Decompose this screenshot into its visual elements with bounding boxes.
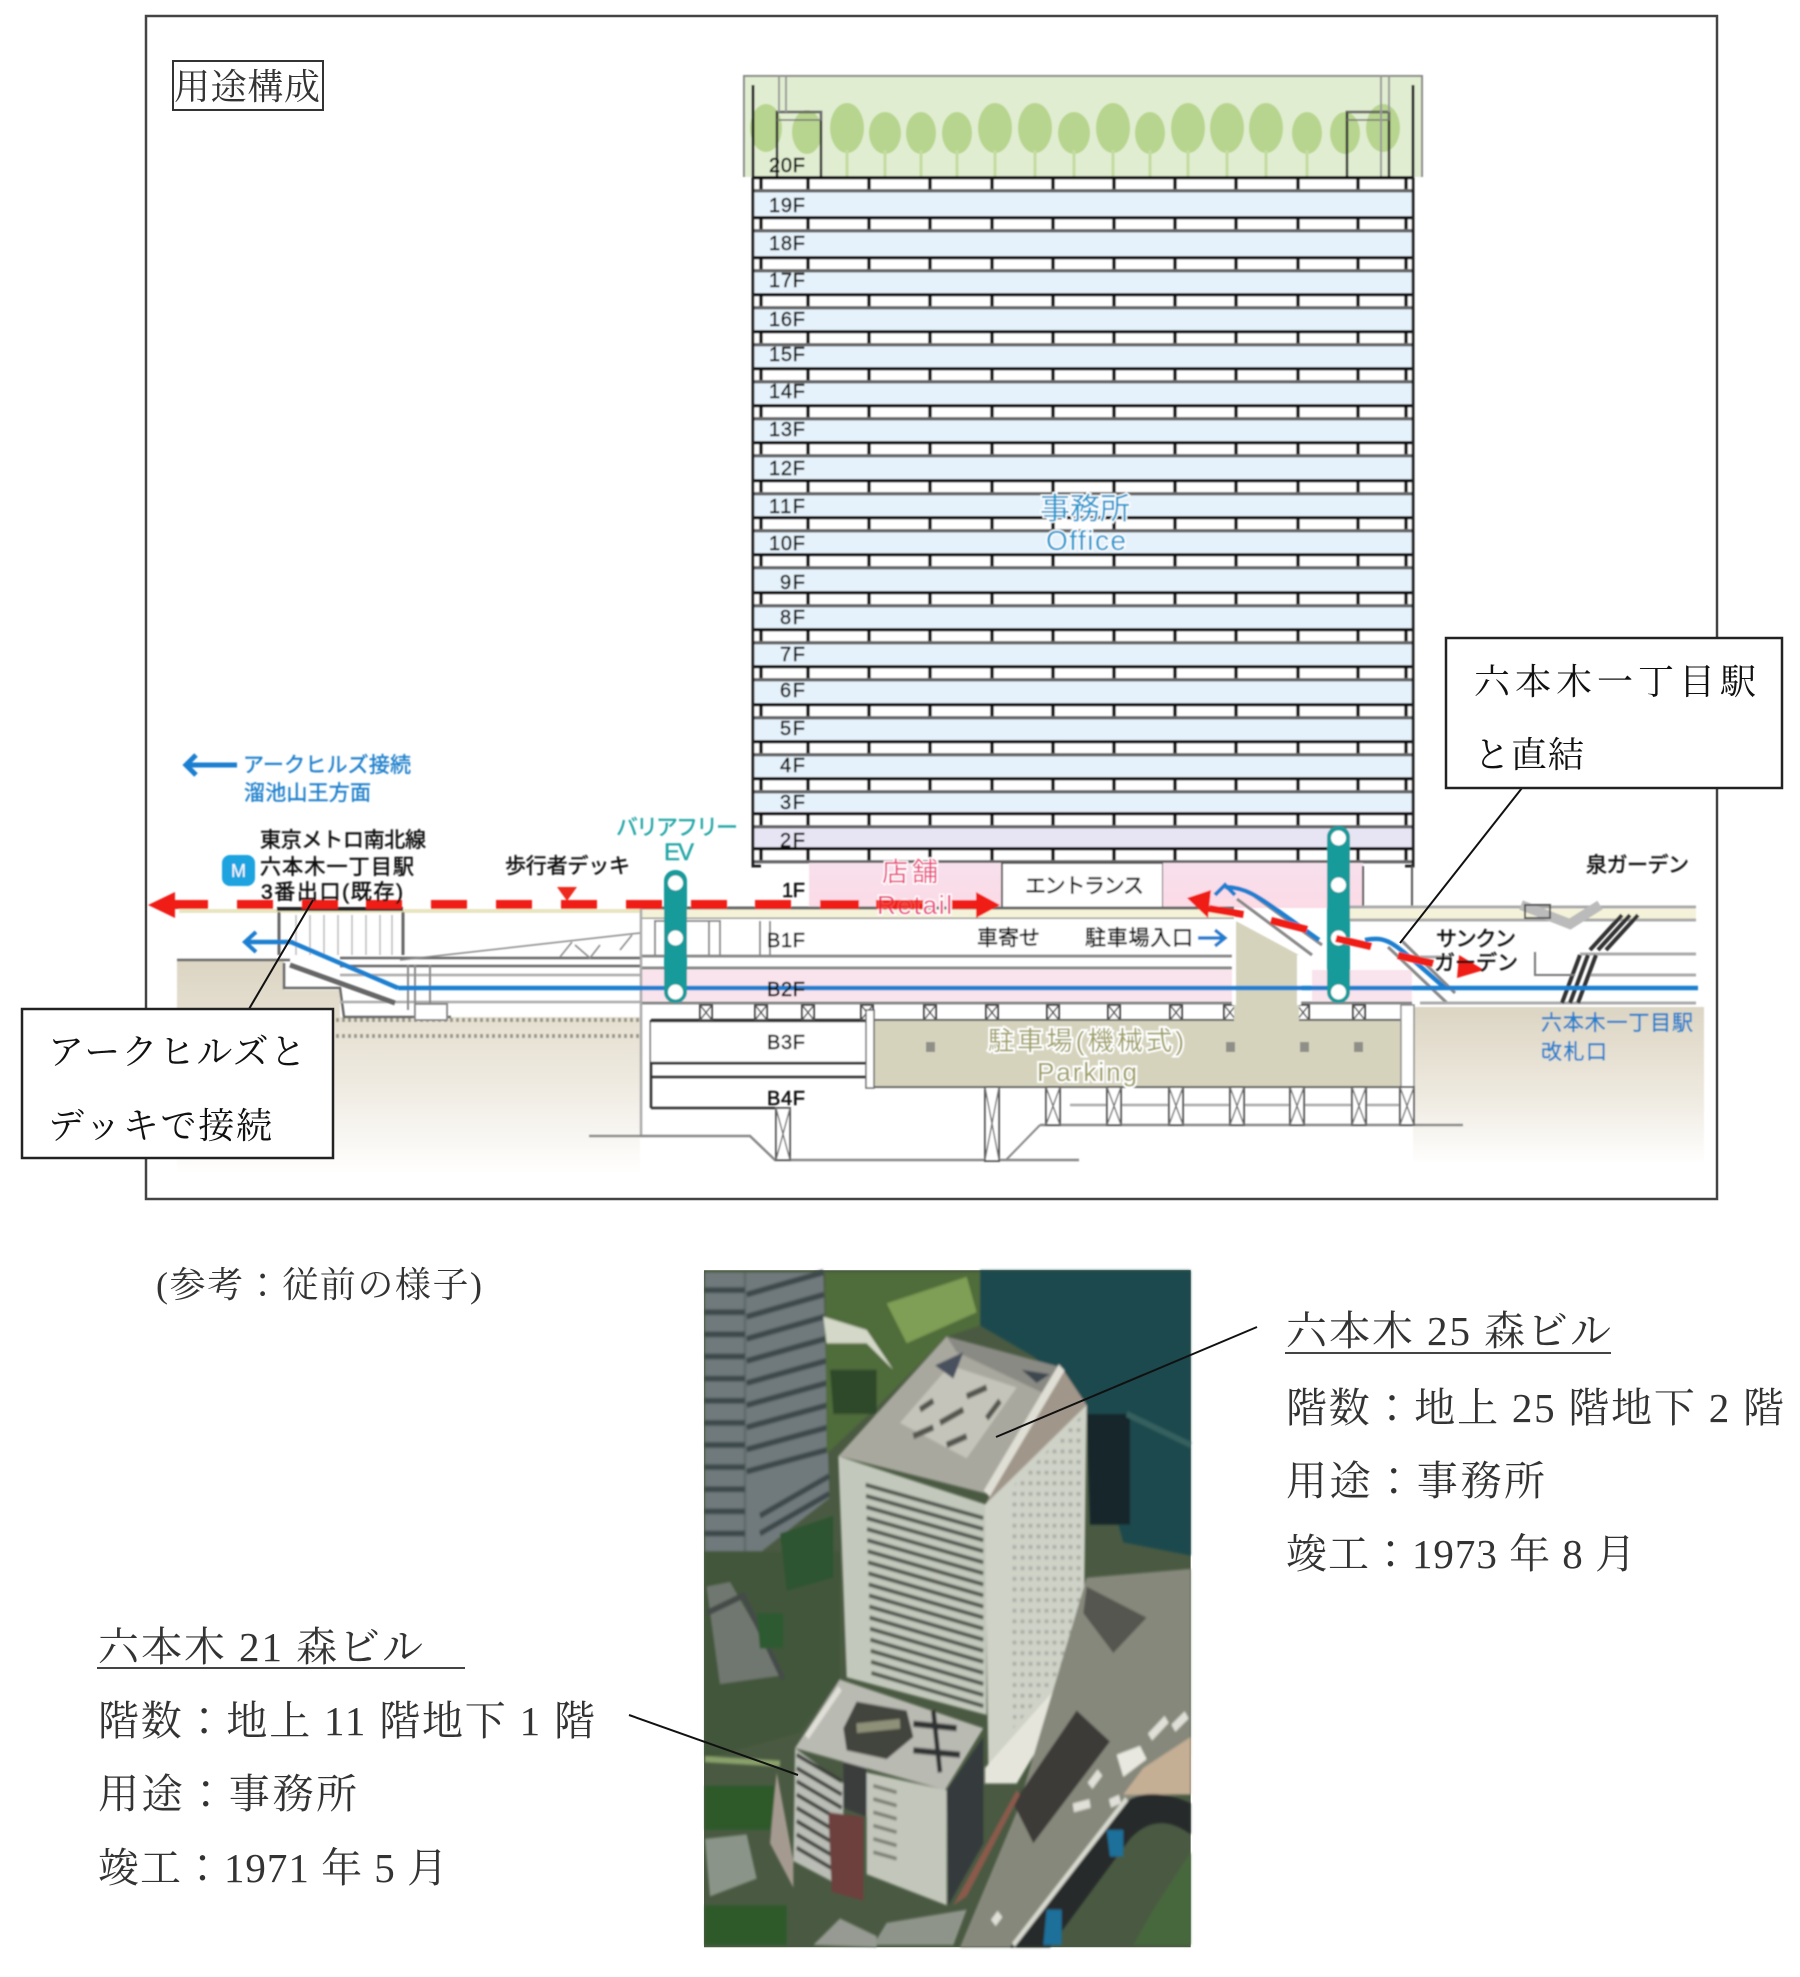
labels: floors: 13F [769,419,805,441]
labels: left station: EV [664,839,694,866]
aerial photo of former buildings [704,1270,1191,1947]
roof structures [777,112,1389,177]
labels: floors: 19F [769,195,805,217]
photo: road and city street [813,1569,1191,1947]
ground: right [1413,1007,1704,1165]
parking block [866,920,1414,1125]
text block: Roppongi 21 Mori Building [97,1624,595,1891]
labels: floors: 6F [780,680,805,702]
substructure columns [589,1087,1463,1161]
text block: Roppongi 25 Mori Building: 用途：事務所 [1286,1458,1545,1504]
photo: low-rise, former Roppongi 21 Mori Building [793,1680,1020,1905]
leader line: Roppongi 25 Mori Building [996,1327,1257,1437]
existing station stair structure [177,909,641,1020]
labels: entrance and basement: 泉ガーデン [1586,854,1689,877]
photo: trees and lower left grounds [705,1272,980,1945]
deck level bands [179,907,1696,920]
labels: floors: 14F [769,381,805,403]
labels: floors: B1F [767,930,805,952]
elevator: barrier-free left [664,870,687,1003]
photo: tower, former Roppongi 25 Mori Building [838,1337,1087,1784]
labels: floors: 12F [769,458,805,480]
labels: entrance and basement [977,854,1693,1064]
labels: entrance and basement: 車寄せ [977,927,1040,950]
labels: floors: 3F [780,792,805,814]
labels: left station: 3番出口(既存) [261,881,403,904]
labels: left station: 六本木一丁目駅 [260,856,414,879]
callout: deck connection to Ark Hills [22,900,333,1158]
text block: Roppongi 21 Mori Building: 六本木 21 森ビル [98,1624,423,1670]
heading: usage composition: 用途構成 [174,67,320,107]
callout: connection to Roppongi 1-chome station: 六本木一丁目駅 [1474,662,1756,702]
ground dotted strata [330,1020,640,1036]
labels: entrance and basement: ガーデン [1434,952,1518,975]
tower roof garden [744,76,1422,177]
label: retail [877,857,952,920]
basement levels [641,905,1412,1137]
labels: floors: 5F [780,718,805,740]
callout: deck connection to Ark Hills: アークヒルズと [48,1032,306,1072]
labels: floors: 10F [769,533,805,555]
labels: floors: 20F [769,155,805,177]
icon: Tokyo Metro [222,855,255,886]
text block: Roppongi 25 Mori Building: 竣工：1973 年 8 月 [1286,1531,1636,1577]
labels: floors: B4F [767,1088,805,1110]
labels: floors: 11F [769,496,805,518]
labels: entrance and basement: エントランス [1025,875,1144,898]
text block: Roppongi 21 Mori Building: 用途：事務所 [98,1771,357,1817]
labels: floors: 9F [780,572,805,594]
labels: entrance and basement: 駐車場入口 [1085,927,1193,950]
deck level marker [557,887,577,901]
labels: floors: 1F [782,880,805,902]
labels: floors [767,155,805,1110]
labels: left station: 東京メトロ南北線 [260,829,426,852]
label: office: Office [1046,525,1126,556]
leader line: Roppongi 21 Mori Building [629,1715,798,1775]
label: office: 事務所 [1040,493,1130,526]
labels: floors: 15F [769,344,805,366]
label: parking: 駐車場(機械式) [988,1026,1184,1056]
labels: floors: 16F [769,309,805,331]
label: retail: 店舗 [882,857,938,887]
trees [750,103,1400,177]
labels: floors: 18F [769,233,805,255]
labels: floors: B2F [767,979,805,1001]
labels: left station [243,754,738,904]
text block: Roppongi 21 Mori Building: 竣工：1971 年 5 月 [98,1845,448,1891]
blue pedestrian route [186,755,1698,988]
icon: Tokyo Metro: M [231,861,246,881]
callout: connection to Roppongi 1-chome station: と直結 [1474,735,1584,775]
text block: Roppongi 21 Mori Building: 階数：地上 11 階地下 1 階 [98,1698,595,1744]
labels: entrance and basement: サンクン [1436,928,1516,951]
panel: building section diagram [22,16,1782,1199]
labels: floors: 2F [780,830,805,852]
red dashed route: sunken garden [1187,890,1484,978]
labels: entrance and basement: 改札口 [1541,1041,1607,1064]
photo: background towers [705,1270,1191,1556]
section drawing [148,76,1704,1175]
callout: connection to Roppongi 1-chome station [1400,638,1782,943]
labels: entrance and basement: 六本木一丁目駅 [1541,1012,1693,1035]
red dashed route: deck [148,892,1000,918]
office floors [753,85,1413,866]
text block: Roppongi 25 Mori Building: 六本木 25 森ビル [1286,1308,1611,1354]
labels: floors: 4F [780,755,805,777]
1F retail and entrance [809,863,1412,908]
labels: floors: B3F [767,1032,805,1054]
red dash over retail label [876,900,923,909]
labels: left station: バリアフリー [616,815,738,840]
labels: floors: 17F [769,270,805,292]
note: previous condition: (参考：従前の様子) [156,1265,482,1305]
ground: left [177,960,640,1175]
elevator: barrier-free right [1327,826,1350,1003]
label: office [1040,493,1130,556]
labels: floors: 7F [780,644,805,666]
label: parking: Parking [1037,1057,1137,1087]
labels: left station: 溜池山王方面 [244,782,371,805]
labels: floors: 8F [780,607,805,629]
label: parking [988,1026,1184,1087]
right end station structures [1237,893,1696,1003]
labels: left station: アークヒルズ接続 [243,754,411,777]
text block: Roppongi 25 Mori Building [1285,1308,1784,1577]
label: retail: Retail [877,890,952,920]
labels: left station: 歩行者デッキ [505,855,630,878]
text block: Roppongi 25 Mori Building: 階数：地上 25 階地下 2 階 [1286,1385,1784,1431]
callout: deck connection to Ark Hills: デッキで接続 [48,1106,272,1146]
